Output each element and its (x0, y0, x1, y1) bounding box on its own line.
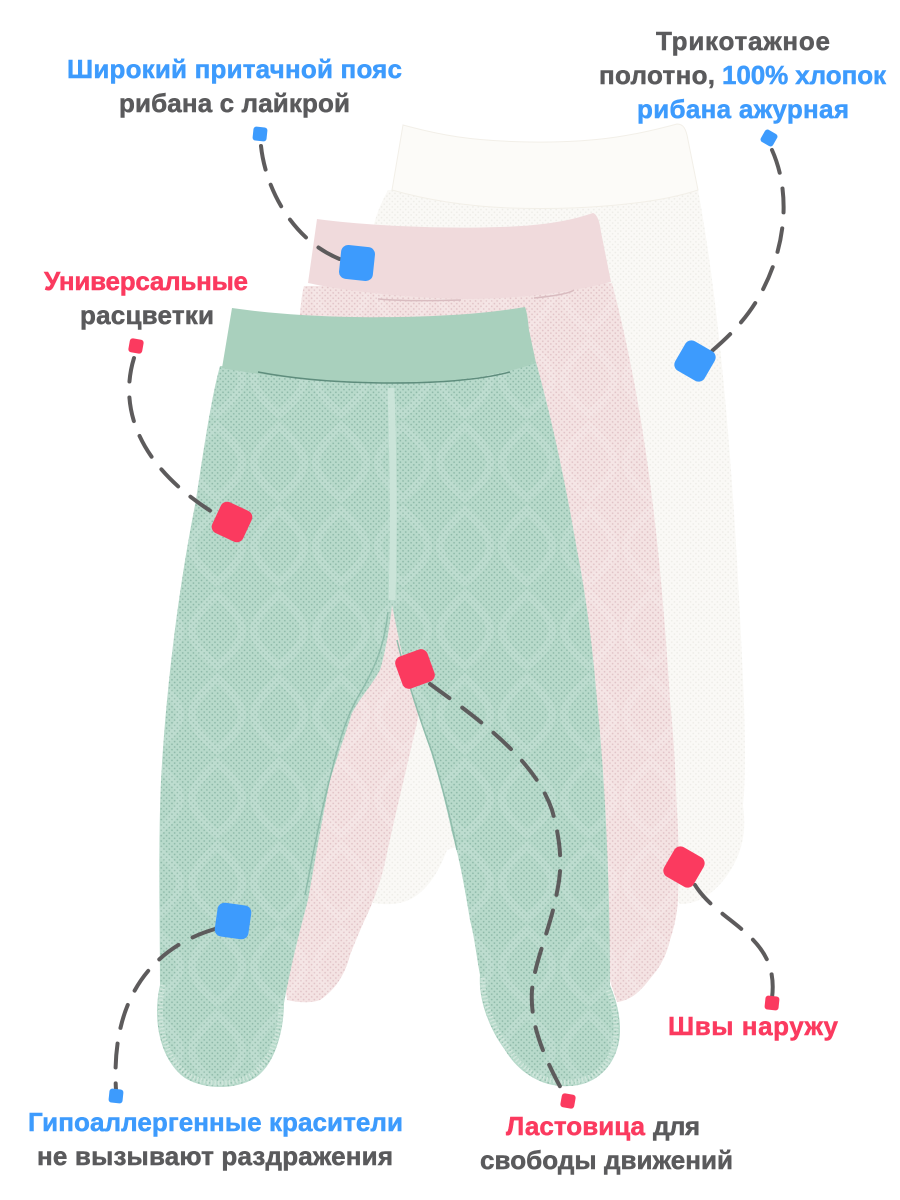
label: fabric: рибана ажурная (637, 94, 849, 124)
connector: colours (129, 358, 222, 518)
label: waistband (67, 54, 402, 118)
callout: waistband (67, 54, 402, 282)
label: dyes: Гипоаллергенные красители (28, 1107, 403, 1137)
label: colours: расцветки (80, 300, 214, 330)
marker small: seams (764, 995, 780, 1011)
callout: dyes (28, 902, 403, 1171)
connector: waistband (261, 146, 342, 260)
green foot hems (160, 978, 616, 1083)
pants: pink (middle) (230, 213, 679, 1002)
green pants front seam (391, 388, 393, 600)
green waistband fold shadow (258, 372, 510, 383)
connector: seams (695, 885, 773, 998)
label: gusset (480, 1111, 733, 1175)
green pants body (157, 362, 620, 1087)
white pants body (372, 190, 745, 904)
label: dyes: не вызывают раздражения (37, 1141, 393, 1171)
pink pants fold stitching (378, 290, 574, 301)
callout: seams (661, 844, 839, 1041)
label: fabric: 100% хлопок (722, 60, 887, 90)
green pants waistband (222, 307, 536, 383)
marker small: waistband (252, 126, 268, 142)
marker small: gusset (560, 1093, 576, 1109)
marker large: seams (661, 844, 707, 890)
label: dyes (28, 1107, 403, 1171)
green inner-leg stitching (305, 612, 457, 895)
marker large: dyes (214, 902, 252, 940)
label: gusset: свободы движений (480, 1145, 733, 1175)
label: fabric: Трикотажное (656, 26, 830, 56)
marker large: fabric (672, 338, 718, 384)
marker large: colours (209, 499, 255, 545)
label: fabric: полотно, (599, 60, 715, 90)
pants: white (back) (372, 124, 745, 904)
white pants waistband (392, 124, 698, 208)
pink pants body (230, 283, 679, 1002)
connector: fabric (706, 150, 784, 356)
label: seams: Швы наружу (668, 1011, 839, 1041)
label: gusset: Ластовица (506, 1111, 646, 1141)
pink pants waistband (308, 213, 611, 299)
marker large: waistband (338, 244, 376, 282)
pants: green (front) (157, 307, 620, 1087)
marker small: colours (128, 338, 144, 354)
label: colours: Универсальные (44, 266, 248, 296)
marker small: dyes (108, 1088, 124, 1104)
callout: colours (44, 266, 255, 545)
marker large: gusset (393, 647, 437, 691)
label: colours (44, 266, 248, 330)
label: gusset: для (653, 1111, 700, 1141)
connector: dyes (116, 929, 215, 1090)
label: waistband: Широкий притачной пояс (67, 54, 402, 84)
connector: gusset (430, 684, 563, 1092)
callout: gusset (393, 647, 733, 1175)
label: waistband: рибана с лайкрой (119, 88, 350, 118)
label: fabric (599, 26, 887, 124)
marker small: fabric (759, 128, 779, 148)
callout: fabric (599, 26, 887, 384)
